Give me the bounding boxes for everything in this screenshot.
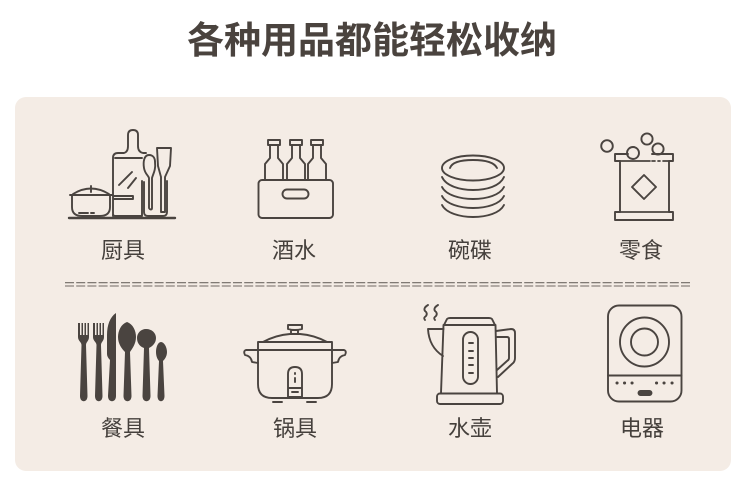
item: appliances [608,306,682,441]
icon: cutlery [78,313,167,401]
icon: induction cooker [608,306,682,402]
divider: double dashed line [65,283,690,286]
icon: kitchenware [69,130,175,218]
label: wine: 酒水 [272,238,316,263]
label: appliances: 电器 [620,416,664,441]
icon: wine crate [258,140,333,218]
icon: kettle [424,305,515,404]
label: cutlery: 餐具 [101,416,145,441]
item: kitchenware [69,130,175,263]
item: cutlery [78,313,167,441]
label: kettle: 水壶 [448,416,492,441]
item: plates [442,156,504,263]
label: plates: 碗碟 [448,238,492,263]
item: cookware [244,325,346,441]
label: cookware: 锅具 [273,416,317,441]
label: snacks: 零食 [619,238,663,263]
item: kettle [424,305,515,441]
item: snacks [601,133,673,263]
icon: snack bag [601,133,673,220]
title: 各种用品都能轻松收纳 [187,20,557,61]
item: wine [258,140,333,263]
label: kitchenware: 厨具 [101,238,145,263]
icon: rice cooker [244,325,346,402]
panel: storage categories [15,97,731,471]
icon: plate stack [442,156,504,217]
